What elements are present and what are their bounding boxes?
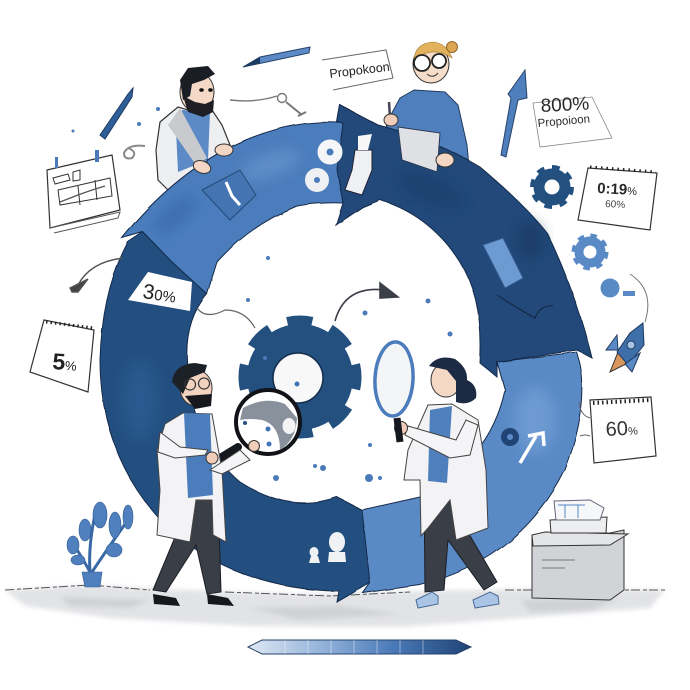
head — [431, 363, 461, 397]
sleeve — [210, 450, 250, 474]
man at bottom left — [153, 363, 260, 606]
shirt — [428, 406, 452, 483]
woman at bottom right — [373, 341, 499, 608]
note: 60% — [590, 397, 656, 463]
rocket trail — [630, 274, 648, 322]
head — [180, 370, 212, 406]
smile — [427, 73, 438, 76]
small white gear two — [310, 172, 324, 188]
line: doodle to gear — [197, 308, 255, 328]
trousers — [424, 482, 497, 592]
segment: lower right light blue — [348, 352, 582, 593]
note: 800% Proportion: 800% — [540, 93, 590, 117]
handle — [199, 447, 238, 471]
arrow: centre curve — [335, 283, 398, 321]
cycle ring — [100, 105, 592, 602]
bottom gradient bar — [248, 640, 471, 654]
pencil, left — [100, 88, 133, 139]
segment: left and bottom dark navy — [100, 232, 370, 602]
arrow: up, right — [501, 70, 527, 157]
hand — [394, 422, 408, 434]
head — [413, 45, 449, 83]
gear dark — [533, 168, 571, 206]
central gear — [235, 312, 365, 442]
30 percent label — [128, 272, 192, 311]
ground — [5, 585, 665, 627]
shirt — [176, 110, 210, 172]
hands — [206, 452, 218, 464]
man at top, behind ring — [156, 66, 232, 192]
note: 60%: 60% — [605, 417, 638, 441]
magnifier, right — [373, 341, 415, 442]
white bottle — [345, 150, 372, 195]
segment: top medium blue — [122, 122, 343, 294]
gear small — [600, 278, 620, 298]
head — [180, 72, 214, 112]
beard — [183, 96, 214, 117]
bottle top — [358, 134, 372, 150]
small gear on light segment — [504, 431, 516, 443]
pen, top — [243, 47, 310, 67]
rocket — [606, 323, 644, 372]
side loops — [579, 402, 590, 436]
label: Propokoon — [322, 50, 393, 90]
white rockets — [309, 532, 346, 563]
note: 0:19% 60% — [578, 167, 657, 230]
lens reflection — [240, 401, 297, 450]
arm — [158, 432, 208, 458]
squiggle arrow — [497, 295, 553, 318]
white squiggle — [226, 182, 240, 205]
key doodle — [230, 94, 306, 116]
magnifier, left — [199, 390, 300, 471]
top man hand one — [215, 144, 233, 156]
note: 0:19% 60%: 0:19% — [597, 180, 638, 199]
trousers — [153, 495, 221, 594]
hair — [429, 358, 476, 403]
speckle dots — [72, 107, 452, 482]
ring watercolour shading — [122, 143, 555, 452]
note: 5%: 5% — [52, 348, 78, 376]
blonde hair — [414, 42, 452, 60]
shirt — [184, 413, 213, 498]
plant — [67, 502, 133, 587]
hair — [172, 363, 207, 394]
gear light blue — [574, 236, 606, 268]
coat lapel — [168, 108, 207, 165]
hair — [180, 66, 215, 100]
curl doodle — [124, 146, 145, 158]
woman at top, behind ring — [384, 42, 470, 178]
pen and hand — [384, 102, 398, 126]
small white gear one — [322, 144, 338, 160]
30 percent label: 30% — [141, 280, 178, 308]
shoes — [416, 592, 499, 608]
arm — [405, 420, 478, 458]
glasses — [185, 378, 210, 390]
eyes — [201, 88, 211, 92]
note: 0:19% 60%: 60% — [605, 199, 626, 211]
arrow: left curve — [70, 258, 123, 292]
boxes — [532, 500, 628, 600]
note: 800% Proportion: Propoioon — [537, 113, 590, 130]
segment: top right dark navy — [336, 105, 592, 377]
laptop — [398, 127, 440, 172]
note: 5% — [30, 320, 94, 392]
document on dark segment — [483, 238, 523, 288]
coat — [156, 107, 232, 192]
lens — [236, 390, 300, 454]
torso — [385, 90, 470, 178]
coat — [404, 404, 488, 540]
left hand on laptop — [436, 153, 454, 167]
hair bun — [446, 42, 458, 52]
calendar — [47, 150, 120, 233]
shoes — [153, 594, 234, 606]
glasses — [414, 54, 446, 71]
label: Propokoon: Propokoon — [329, 60, 390, 81]
paper on top segment — [202, 170, 256, 220]
coat — [157, 413, 226, 542]
ring details — [128, 127, 553, 563]
dash — [623, 291, 635, 296]
top man hand two — [191, 158, 213, 176]
white arrow — [520, 433, 544, 463]
note: 800% Proportion — [533, 93, 612, 147]
beard — [185, 394, 212, 409]
